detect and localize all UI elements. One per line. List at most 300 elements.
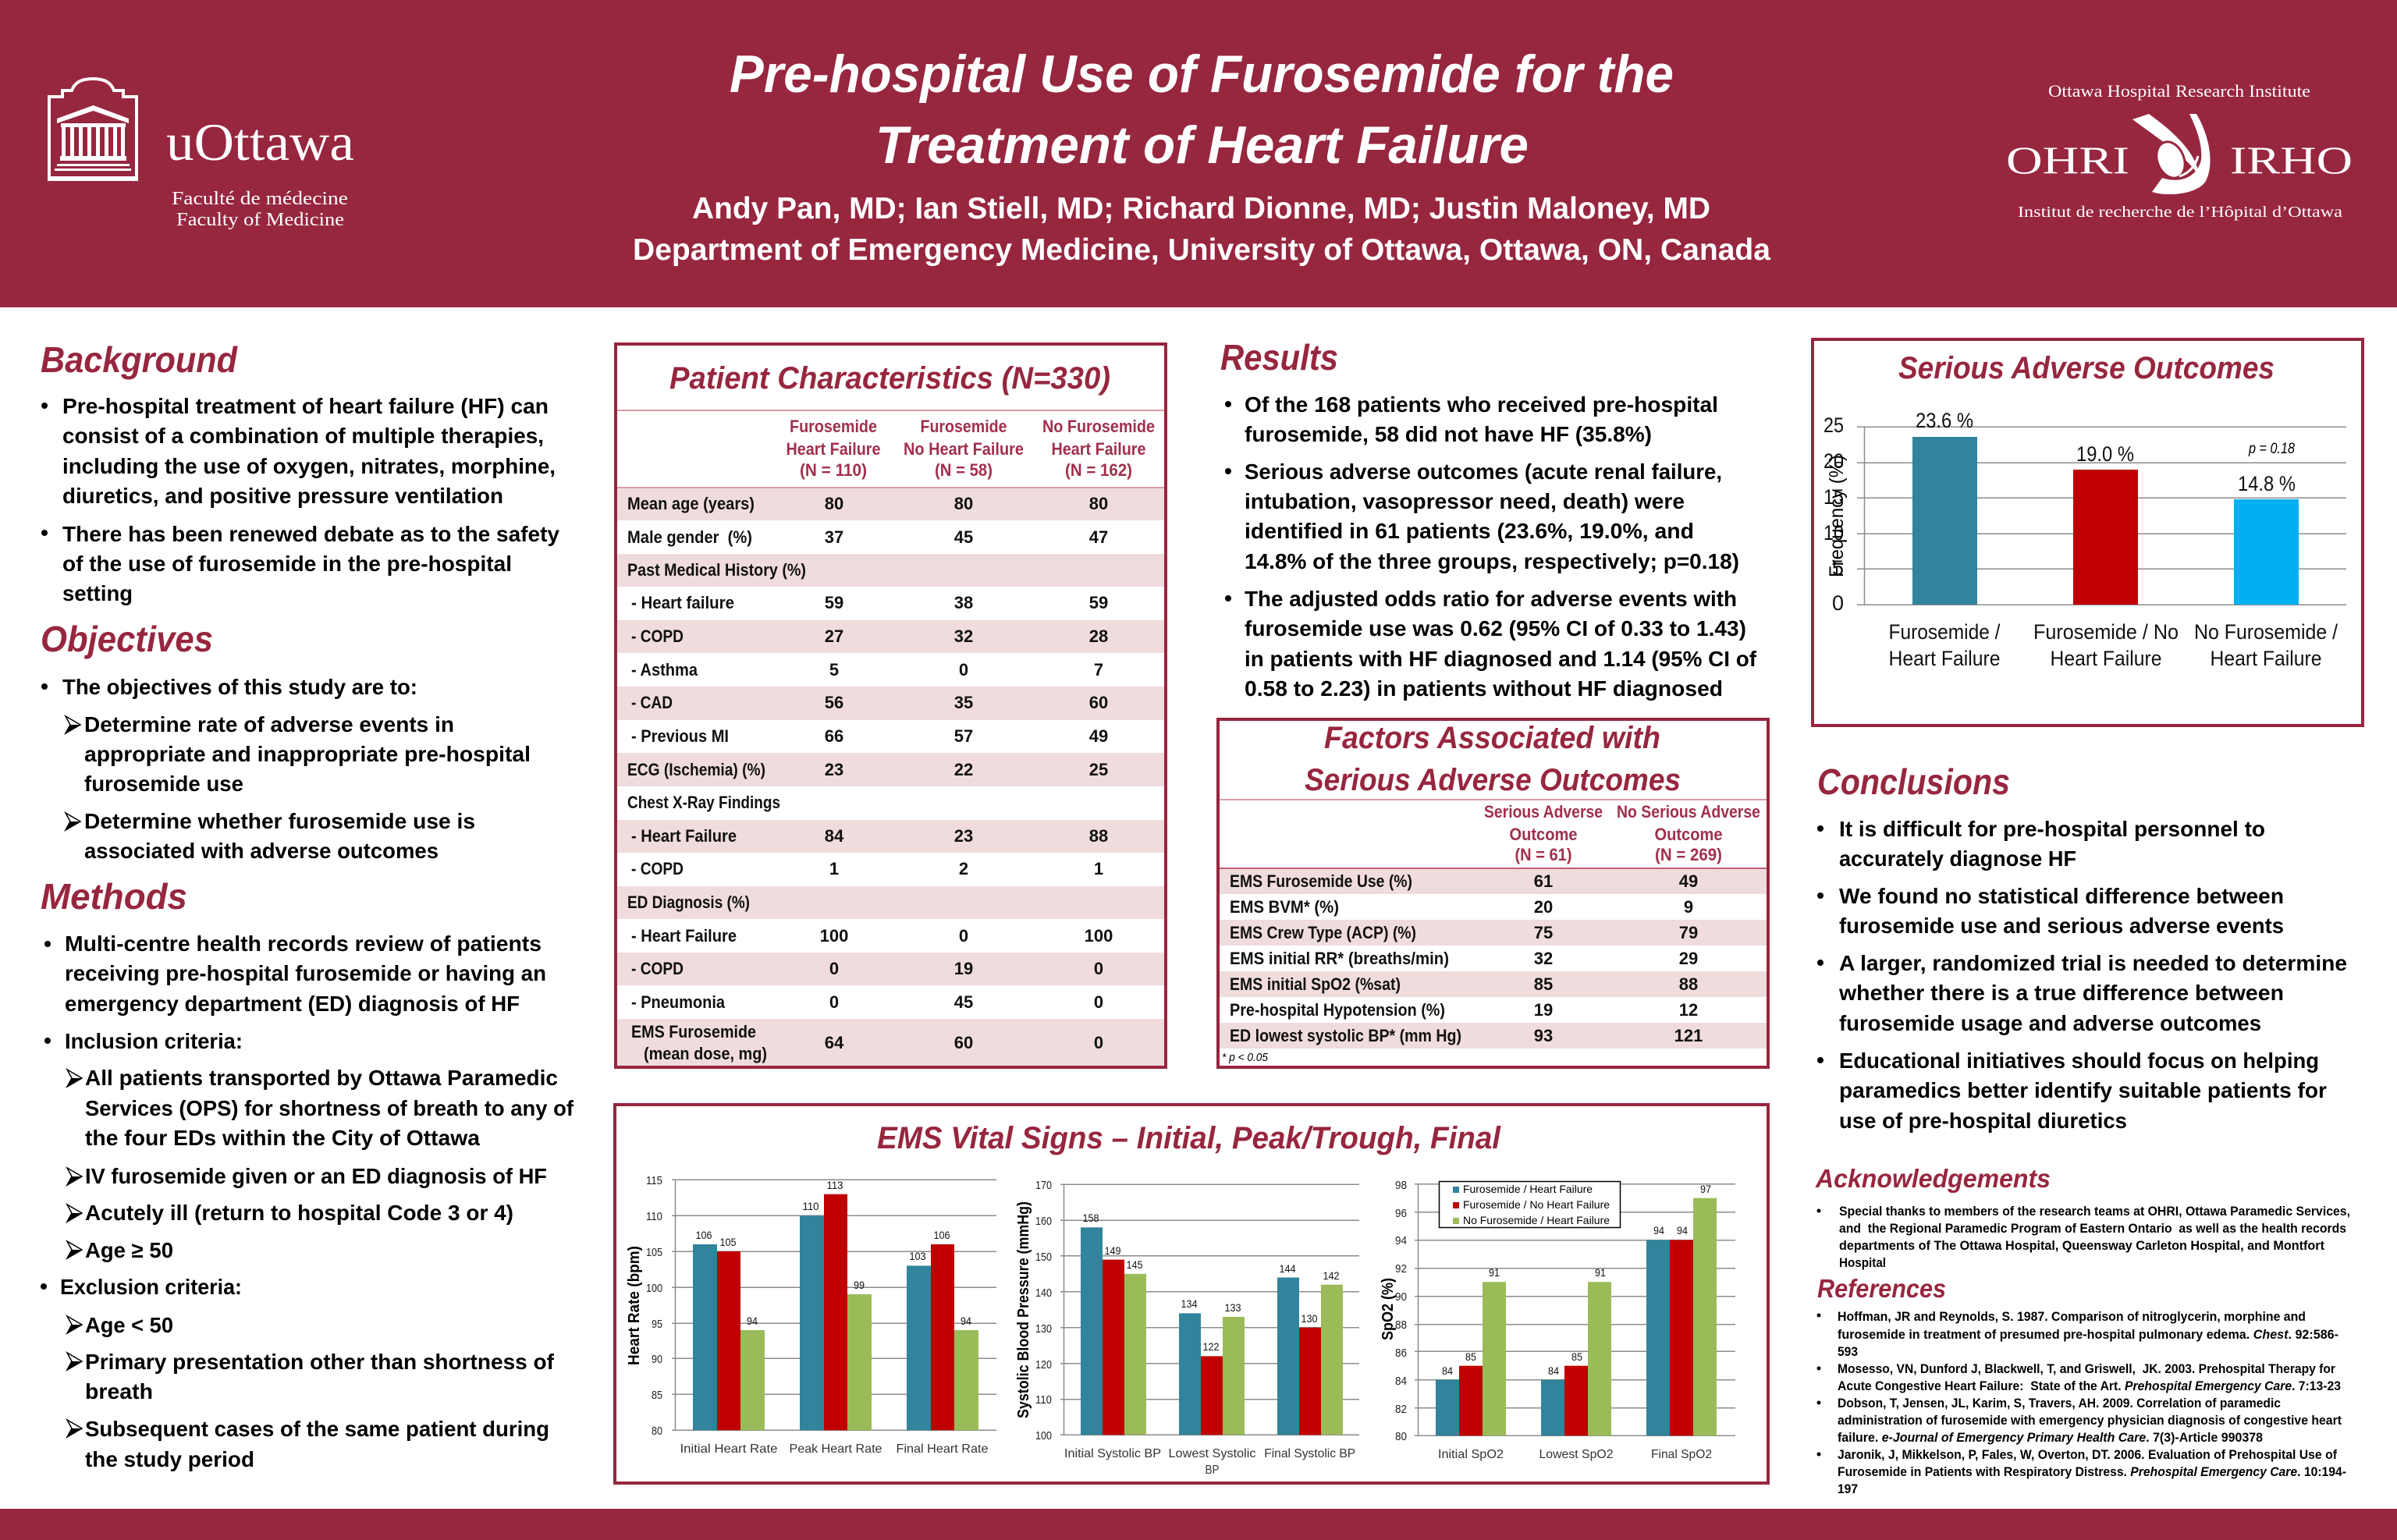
table rows: - Pneumonia [631,992,726,1012]
table header: No Heart Failure [904,439,1024,459]
bar chart: SpO2: 91 [1595,1266,1606,1279]
text block: results bullets: furosemide use was 0.62 (95% CI of 0.33 to 1.43) [1245,616,1746,640]
table rows: - Previous MI [631,726,729,746]
table rows: 5 [829,660,839,680]
table rows: 1 [829,859,839,878]
heading: Results: Results [1220,337,1338,378]
bar chart: heart rate: 94 [747,1315,758,1327]
table rows: - COPD [631,626,684,646]
bar chart: systolic blood pressure: 149 [1105,1244,1121,1257]
bar chart: SpO2: 80 [1395,1430,1407,1443]
bar chart: SpO2: 84 [1395,1375,1407,1388]
table header: (N = 269) [1655,845,1722,864]
text block: methods bullets: breath [85,1379,153,1403]
bar chart: SpO2: 92 [1395,1262,1407,1276]
bar chart: systolic blood pressure: Lowest Systolic [1169,1447,1256,1460]
text block: methods bullets: Age ≥ 50 [85,1238,173,1262]
table rows: 32 [954,626,973,646]
text block: results bullets: 0.58 to 2.23) in patients without HF diagnosed [1245,676,1723,701]
text block: methods bullets [41,931,574,1471]
legend: Furosemide / No Heart Failure [1463,1198,1610,1211]
legend: Furosemide / Heart Failure [1463,1183,1593,1195]
panel: serious adverse outcomes chart [1813,339,2363,726]
bar chart: frequency [1823,409,2346,670]
bar chart: SpO2: Final SpO2 [1651,1448,1712,1461]
text block: background bullets: diuretics, and positive pressure ventilation [62,484,503,508]
table rows: 28 [1089,626,1108,646]
bar chart: heart rate: 113 [827,1179,843,1191]
bar chart: heart rate: 95 [652,1318,662,1331]
legend: No Furosemide / Heart Failure [1463,1214,1610,1226]
bar chart: heart rate: 85 [652,1389,662,1402]
icon: uOttawa building crest [48,79,138,181]
bar chart: SpO2: 91 [1489,1266,1500,1279]
text block: conclusions bullets: accurately diagnose HF [1839,846,2076,871]
bar chart: frequency: 20 [1823,449,1844,473]
table rows: Male gender (%) [627,527,752,547]
table rows: 38 [954,593,973,612]
text block: acknowledgements: Hospital [1839,1255,1886,1270]
text block: methods bullets: Age < 50 [85,1313,173,1337]
bar chart: frequency: Furosemide / [1888,620,2001,644]
text block: methods bullets: Multi-centre health records review of patients [65,931,542,956]
text block: conclusions bullets: It is difficult for pre-hospital personnel to [1839,817,2265,841]
bar chart: frequency: 19.0 % [2076,442,2134,466]
table title [1305,721,1681,797]
bar chart: heart rate: Heart Rate (bpm) [626,1246,643,1365]
bar chart: heart rate: 80 [652,1425,662,1438]
table rows: 64 [825,1033,844,1052]
logo: OHRI: IRHO [2230,138,2353,182]
table rows: 60 [1089,693,1108,712]
bar chart: systolic blood pressure [1015,1179,1359,1477]
table rows: (mean dose, mg) [644,1044,767,1063]
text block: acknowledgements: and the Regional Paramedic Program of Eastern Ontario as well as the health records [1839,1221,2346,1236]
table header: No Furosemide [1042,417,1155,436]
title: Treatment of Heart Failure [875,115,1529,175]
text block: methods bullets: Inclusion criteria: [65,1029,243,1053]
table rows: ED lowest systolic BP* (mm Hg) [1230,1026,1461,1045]
text block: references list: failure. e-Journal of Emergency Primary Health Care. 7(3)-Article 990378 [1838,1430,2263,1445]
bar chart: systolic blood pressure: 130 [1301,1312,1318,1325]
text block: results bullets [1225,392,1757,701]
text block: references list: administration of furosemide with emergency physician diagnosis of congestive heart [1838,1413,2342,1428]
bar chart: frequency: No Furosemide / [2194,620,2338,644]
text block: references list: Dobson, T, Jensen, JL, Karim, S, Travers, AH. 2009. Correlation of paramedic [1838,1396,2281,1410]
text block: background bullets: Pre-hospital treatment of heart failure (HF) can [62,394,549,418]
footer band [0,1509,2397,1540]
bar chart: systolic blood pressure: Initial Systolic BP [1064,1447,1161,1460]
text block: methods bullets: receiving pre-hospital furosemide or having an [65,961,546,985]
text block: background bullets: There has been renewed debate as to the safety [62,522,559,546]
panel: references [1816,1274,2346,1496]
table rows: EMS initial RR* (breaths/min) [1230,949,1449,968]
icon: OHRI swoosh [2132,114,2211,194]
text block: results bullets: Serious adverse outcomes (acute renal failure, [1245,460,1722,484]
text block: references list: Mosesso, VN, Dunford J, Blackwell, T, and Griswell, JK. 2003. Prehospital Therapy for [1838,1361,2335,1376]
text block: results bullets: in patients with HF diagnosed and 1.14 (95% CI of [1245,647,1757,671]
faculty line fr: Faculté de médecine [172,189,348,209]
table rows: - COPD [631,959,684,978]
table rows: ECG (Ischemia) (%) [627,760,765,779]
table rows: 45 [954,992,973,1012]
heading: Objectives: Objectives [41,619,213,659]
table rows: EMS initial SpO2 (%sat) [1230,974,1401,994]
panel: factors table [1218,719,1768,1067]
text block: conclusions bullets: paramedics better identify suitable patients for [1839,1078,2327,1102]
panel: background [41,339,559,605]
bar chart: heart rate: Final Heart Rate [896,1442,989,1456]
text block: methods bullets: emergency department (ED) diagnosis of HF [65,992,520,1016]
bar chart: frequency: Heart Failure [2210,647,2322,670]
panel: methods [41,876,574,1471]
table rows: 37 [825,527,843,547]
text block: background bullets: consist of a combination of multiple therapies, [62,424,544,448]
bar chart: heart rate: 99 [854,1279,865,1291]
table rows: 121 [1674,1026,1703,1045]
bar chart: heart rate: 106 [696,1229,712,1241]
bar chart: SpO2: 84 [1442,1364,1453,1377]
authors and affiliation: Department of Emergency Medicine, University of Ottawa, Ottawa, ON, Canada [633,233,1770,267]
logo: OHRI: Institut de recherche de l’Hôpital d’Ottawa [2018,204,2342,221]
table rows: 0 [829,959,839,978]
legend [1439,1181,1620,1228]
bar chart: heart rate: Initial Heart Rate [680,1442,778,1456]
table rows: 0 [1094,1033,1103,1052]
bar chart: heart rate: 115 [646,1174,662,1187]
bar chart: systolic blood pressure: 134 [1181,1297,1198,1310]
bar chart: SpO2: 98 [1395,1179,1407,1192]
table rows: - Heart Failure [631,926,737,946]
table rows: 80 [954,494,973,513]
bar chart: systolic blood pressure: 170 [1035,1179,1052,1192]
bar chart: systolic blood pressure: BP [1205,1464,1219,1477]
authors and affiliation: Andy Pan, MD; Ian Stiell, MD; Richard Dionne, MD; Justin Maloney, MD [692,192,1710,225]
bar chart: systolic blood pressure: 133 [1225,1301,1241,1314]
table rows: 88 [1679,974,1698,994]
header band [0,0,2397,307]
bar chart: frequency: Heart Failure [2051,647,2161,670]
bar chart: frequency: 15 [1823,485,1844,509]
bar chart: SpO2: 88 [1395,1318,1407,1332]
text block: background bullets [41,394,559,605]
table rows: 0 [829,992,839,1012]
bar chart: SpO2: 96 [1395,1207,1407,1220]
table rows: 49 [1679,871,1698,891]
text block: results bullets: furosemide, 58 did not have HF (35.8%) [1245,422,1652,446]
text block: conclusions bullets: Educational initiatives should focus on helping [1839,1049,2319,1073]
table rows: Past Medical History (%) [627,560,806,580]
table header [1220,799,1767,869]
text block: methods bullets: the four EDs within the City of Ottawa [85,1126,480,1150]
table rows: 19 [954,959,973,978]
heading: Acknowledgements: Acknowledgements [1815,1164,2051,1193]
text block: references list: furosemide in treatment of presumed pre-hospital pulmonary edema. Chest. 92:586- [1838,1327,2338,1342]
bar chart: systolic blood pressure: 122 [1203,1340,1220,1353]
text block: methods bullets: IV furosemide given or an ED diagnosis of HF [85,1164,547,1188]
text block: conclusions bullets: whether there is a true difference between [1838,981,2284,1005]
text block: conclusions bullets: furosemide usage and adverse outcomes [1839,1011,2261,1035]
text block: conclusions bullets [1817,817,2347,1133]
table rows: 84 [825,826,844,846]
table rows: - CAD [631,693,673,712]
text block: objectives bullets: appropriate and inappropriate pre-hospital [84,742,531,766]
table rows: 56 [825,693,843,712]
table rows: 85 [1534,974,1553,994]
bar chart: frequency: Frequency (%) [1826,455,1848,577]
title [730,44,1674,175]
table title: Serious Adverse Outcomes [1305,763,1681,797]
bar chart: frequency: 0 [1832,591,1844,615]
bar chart: SpO2: 85 [1465,1350,1476,1363]
bar chart: systolic blood pressure: 160 [1035,1215,1052,1228]
bar chart: heart rate: 100 [646,1282,662,1295]
table rows: 22 [954,760,973,779]
table title: Patient Characteristics (N=330) [669,361,1110,396]
text block: references list: 593 [1838,1344,1858,1359]
table rows: - Heart failure [631,593,734,612]
table rows: 93 [1534,1026,1553,1045]
table title: Factors Associated with [1324,721,1660,755]
table rows: 12 [1679,1000,1698,1020]
bar chart: heart rate: 105 [646,1246,662,1259]
table rows: 23 [954,826,973,846]
table header: (N = 61) [1515,845,1571,864]
text block: conclusions bullets: furosemide use and serious adverse events [1839,914,2284,938]
text block: objectives bullets: The objectives of this study are to: [62,675,417,699]
bar chart: heart rate: 94 [961,1315,971,1327]
table rows: 47 [1089,527,1108,547]
text block: background bullets: setting [62,581,133,605]
text block: results bullets: identified in 61 patients (23.6%, 19.0%, and [1245,519,1694,543]
heading: Conclusions: Conclusions [1817,761,2010,802]
table rows: 23 [825,760,843,779]
table rows: EMS Furosemide [631,1022,756,1041]
text block: acknowledgements [1816,1204,2350,1270]
bar chart: frequency: 25 [1823,413,1844,437]
table rows: 57 [954,726,973,746]
bar chart: frequency: 23.6 % [1916,409,1973,432]
text block: references list [1816,1309,2346,1496]
bar chart: systolic blood pressure: 140 [1035,1286,1052,1300]
table rows: 0 [959,660,968,680]
table rows: 29 [1679,949,1698,968]
bar chart: SpO2: 82 [1395,1403,1407,1416]
table header [617,410,1164,488]
table rows: 0 [1094,959,1103,978]
bar chart: SpO2 [1380,1179,1735,1461]
wordmark: uOttawa [166,112,354,172]
logo: OHRI: Ottawa Hospital Research Institute [2048,81,2310,101]
table header: Serious Adverse [1484,802,1603,821]
bar chart: frequency: 10 [1823,521,1844,545]
table rows: 45 [954,527,973,547]
title: Pre-hospital Use of Furosemide for the [730,44,1674,104]
table rows: 20 [1534,897,1553,917]
heading: Background: Background [41,339,238,380]
bar chart: SpO2: 97 [1700,1183,1711,1195]
table rows [1220,869,1767,1049]
bar chart: systolic blood pressure: 120 [1035,1358,1052,1371]
footnote: * p < 0.05 [1222,1051,1269,1064]
bar chart: heart rate: 106 [933,1229,950,1241]
table rows: Pre-hospital Hypotension (%) [1230,1000,1445,1020]
bar chart: systolic blood pressure: 144 [1280,1262,1296,1275]
text block: results bullets: 14.8% of the three groups, respectively; p=0.18) [1245,549,1739,573]
table rows: 60 [954,1033,973,1052]
faculty line en: Faculty of Medicine [176,210,344,230]
bar chart: heart rate: Peak Heart Rate [790,1442,882,1456]
bar chart: heart rate [626,1174,996,1456]
bar chart: SpO2: 84 [1548,1364,1559,1377]
table rows: 0 [959,926,968,946]
table rows: 61 [1534,871,1553,891]
panel: results [1220,337,1757,701]
text block: references list: Furosemide in Patients with Respiratory Distress. Prehospital Emergency Care. 10:194- [1838,1464,2346,1479]
text block: references list: 197 [1838,1481,1858,1496]
bar chart: SpO2: 86 [1395,1347,1407,1360]
bar chart: frequency: Furosemide / No [2033,620,2179,644]
table rows: 32 [1534,949,1553,968]
table rows: 79 [1679,923,1698,942]
text block: background bullets: of the use of furosemide in the pre-hospital [62,552,512,576]
table rows: Mean age (years) [627,494,755,513]
panel: acknowledgements [1815,1164,2350,1270]
text block: objectives bullets [41,675,531,863]
table rows: - Asthma [631,660,698,680]
table rows [617,488,1164,1066]
bar chart: frequency: p = 0.18 [2248,441,2295,457]
table header: No Serious Adverse [1617,802,1760,821]
table rows: Chest X-Ray Findings [627,793,780,812]
table header: Heart Failure [787,439,880,459]
bar chart: SpO2: 94 [1395,1234,1407,1247]
bar chart: heart rate: 105 [719,1236,737,1248]
bar chart: SpO2: SpO2 (%) [1380,1278,1397,1340]
panel: conclusions [1817,761,2347,1133]
table rows: 88 [1089,826,1108,846]
bar chart: SpO2: 94 [1677,1224,1688,1237]
text block: acknowledgements: Special thanks to members of the research teams at OHRI, Ottawa Paramedic Services, [1839,1204,2350,1219]
table rows: EMS Furosemide Use (%) [1230,871,1412,891]
text block: acknowledgements: departments of The Ottawa Hospital, Queensway Carleton Hospital, and Montfort [1839,1238,2324,1253]
bar chart: frequency: 14.8 % [2238,472,2296,495]
table rows: 35 [954,693,973,712]
authors and affiliation [633,192,1770,267]
table rows: 1 [1094,859,1103,878]
bar chart: systolic blood pressure: 158 [1083,1212,1099,1224]
bar chart: heart rate: 110 [802,1200,819,1212]
table rows: 19 [1534,1000,1553,1020]
text block: methods bullets: the study period [85,1447,254,1471]
text block: methods bullets: Exclusion criteria: [60,1275,242,1299]
bar chart: systolic blood pressure: Systolic Blood Pressure (mmHg) [1015,1201,1032,1418]
bar chart: SpO2: 90 [1395,1290,1407,1304]
table rows: 0 [1094,992,1103,1012]
bar chart: systolic blood pressure: 142 [1323,1269,1340,1282]
text block: conclusions bullets: use of pre-hospital diuretics [1839,1109,2127,1133]
bar chart: systolic blood pressure: 150 [1035,1251,1052,1264]
text block: methods bullets: Subsequent cases of the same patient during [85,1417,549,1441]
bar chart: systolic blood pressure: 145 [1127,1258,1143,1271]
text block: background bullets: including the use of oxygen, nitrates, morphine, [62,454,556,478]
bar chart: SpO2: 94 [1653,1224,1664,1237]
table rows: 59 [1089,593,1108,612]
table rows: EMS Crew Type (ACP) (%) [1230,923,1416,942]
text block: results bullets: The adjusted odds ratio for adverse events with [1245,587,1737,611]
text block: objectives bullets: associated with adverse outcomes [84,839,439,863]
bar chart: systolic blood pressure: 100 [1035,1429,1052,1442]
text block: references list: Hoffman, JR and Reynolds, S. 1987. Comparison of nitroglycerin, morphine and [1838,1309,2306,1324]
heading: References: References [1817,1274,1946,1303]
text block: objectives bullets: furosemide use [84,772,243,796]
table rows: 75 [1534,923,1553,942]
text block: results bullets: intubation, vasopressor need, death) were [1245,489,1685,513]
bar chart: SpO2: Initial SpO2 [1438,1448,1504,1461]
table rows: - Heart Failure [631,826,737,846]
table rows: 100 [820,926,848,946]
table header: (N = 162) [1065,460,1132,480]
table header: Outcome [1654,825,1723,844]
table rows: 2 [959,859,968,878]
table rows: 80 [825,494,843,513]
table rows: 49 [1089,726,1108,746]
table rows: 27 [825,626,843,646]
bar chart: systolic blood pressure: Final Systolic BP [1264,1447,1355,1460]
table rows: 9 [1684,897,1693,917]
bar chart: SpO2: 85 [1571,1350,1582,1363]
bar chart: SpO2: Lowest SpO2 [1539,1448,1614,1461]
table header: (N = 58) [935,460,993,480]
bar chart: frequency: Heart Failure [1888,647,2001,670]
text block: objectives bullets: Determine whether furosemide use is [84,809,475,833]
bar chart: frequency: 5 [1832,556,1844,580]
text block: references list: Acute Congestive Heart Failure: State of the Art. Prehospital Emergency Care. 7:13-23 [1838,1379,2341,1393]
table rows: 59 [825,593,843,612]
table header: (N = 110) [800,460,867,480]
panel title: EMS Vital Signs – Initial, Peak/Trough, Final [877,1121,1501,1155]
panel: patient characteristics table [616,344,1166,1067]
table rows: EMS BVM* (%) [1230,897,1339,917]
table rows: 80 [1089,494,1108,513]
bar chart: heart rate: 103 [910,1250,926,1262]
table rows: - COPD [631,859,684,878]
table header: Heart Failure [1052,439,1145,459]
logo: OHRI [2006,81,2353,221]
text block: results bullets: Of the 168 patients who received pre-hospital [1245,392,1718,417]
text block: methods bullets: All patients transported by Ottawa Paramedic [85,1066,558,1090]
table header: Outcome [1509,825,1578,844]
text block: methods bullets: Services (OPS) for shortness of breath to any of [85,1096,574,1120]
text block: conclusions bullets: A larger, randomized trial is needed to determine [1839,951,2347,975]
table rows: 100 [1085,926,1113,946]
bar chart: heart rate: 90 [652,1353,662,1366]
text block: objectives bullets: Determine rate of adverse events in [84,712,454,736]
text block: methods bullets: Primary presentation other than shortness of [85,1350,555,1374]
bar chart: heart rate: 110 [646,1210,662,1223]
table header: Furosemide [790,417,877,436]
panel: EMS vital signs [615,1105,1768,1483]
text block: methods bullets: Acutely ill (return to hospital Code 3 or 4) [85,1201,513,1225]
chart title: Serious Adverse Outcomes [1898,351,2274,385]
table header: Furosemide [921,417,1007,436]
table rows: 7 [1094,660,1103,680]
bar chart: systolic blood pressure: 130 [1035,1322,1052,1336]
bar chart: systolic blood pressure: 110 [1035,1393,1052,1407]
text block: references list: Jaronik, J, Mikkelson, P, Fales, W, Overton, DT. 2006. Evaluation of Prehospital Use of [1838,1447,2337,1462]
table rows: ED Diagnosis (%) [627,892,750,912]
table rows: 25 [1089,760,1108,779]
